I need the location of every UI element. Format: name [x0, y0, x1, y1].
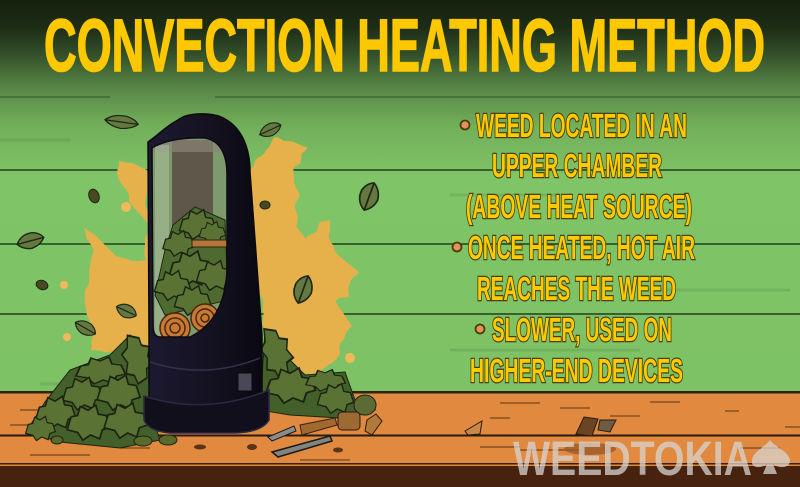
- switch: [238, 373, 252, 391]
- watermark logo: WEEDTOKIA: [513, 433, 752, 486]
- left leaf pile: [26, 332, 177, 448]
- bullet point 2: [452, 229, 695, 307]
- device base: [144, 390, 269, 433]
- bullet point 3: [470, 311, 683, 389]
- device tower body: [148, 114, 262, 410]
- icon: spade: [752, 440, 790, 474]
- glass chamber: [152, 138, 233, 343]
- bullet point 1: [460, 107, 692, 225]
- right leaf pile: [255, 324, 376, 418]
- bullet list: [452, 107, 695, 389]
- wooden table: [0, 391, 800, 487]
- bullet point 1: UPPER CHAMBER: [492, 147, 662, 184]
- orange heat cloud behind device: [83, 140, 360, 377]
- coils at chamber bottom: [159, 303, 217, 336]
- heat glow spots: [60, 202, 355, 363]
- floating leaves: [15, 113, 383, 340]
- bullet point 3: SLOWER, USED ON: [492, 311, 672, 348]
- grinder debris and joints: [194, 412, 382, 457]
- vaporizer device: [144, 114, 269, 433]
- stray debris on table: [465, 417, 616, 455]
- buds inside chamber: [154, 207, 233, 315]
- device mid section seam: [150, 358, 260, 370]
